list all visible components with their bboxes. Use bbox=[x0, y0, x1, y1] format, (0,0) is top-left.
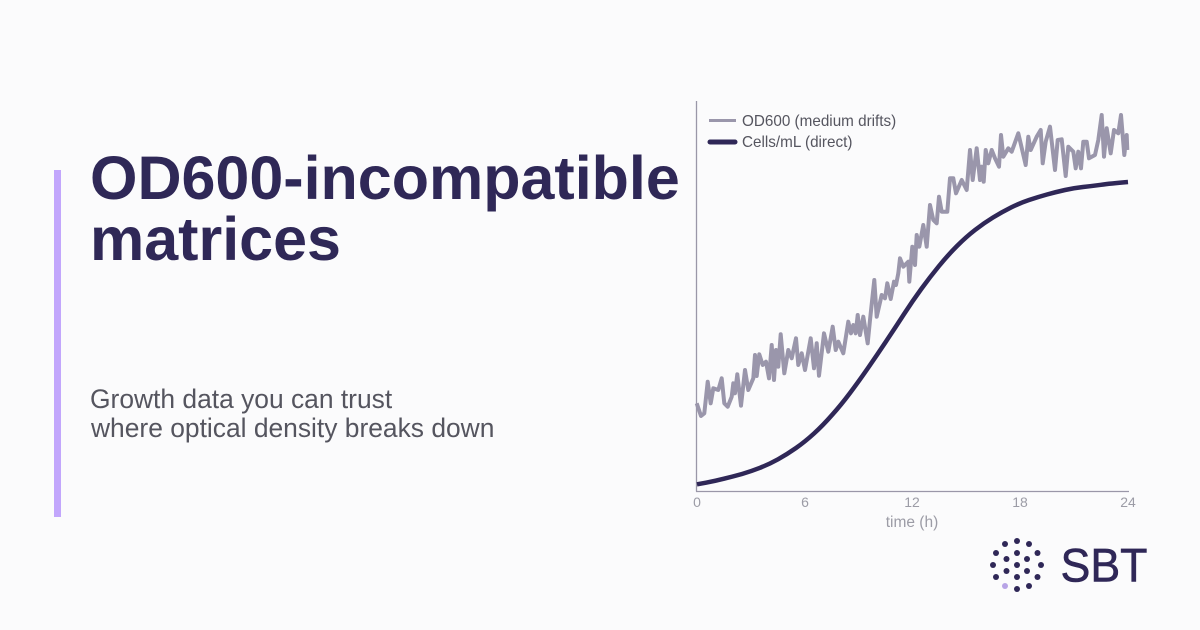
subtitle bbox=[90, 384, 494, 443]
line chart bbox=[693, 101, 1136, 531]
x axis tick labels: 6 bbox=[801, 494, 809, 510]
x axis bbox=[696, 490, 1129, 492]
x axis tick labels: 0 bbox=[693, 494, 701, 510]
logo wordmark: SBT bbox=[1060, 538, 1148, 592]
legend item: Cells/mL: Cells/mL (direct) bbox=[742, 134, 852, 151]
x axis tick labels: 18 bbox=[1012, 494, 1028, 510]
series: OD600 bbox=[697, 115, 1127, 416]
x axis tick labels: 12 bbox=[904, 494, 920, 510]
title: matrices bbox=[90, 205, 341, 273]
accent bar bbox=[54, 170, 61, 517]
title: OD600-incompatible bbox=[90, 144, 680, 212]
y axis bbox=[696, 101, 698, 492]
subtitle: Growth data you can trust bbox=[90, 384, 393, 414]
series: Cells/mL bbox=[697, 182, 1128, 484]
logo: SBT bbox=[990, 538, 1148, 592]
x axis tick labels bbox=[693, 494, 1136, 510]
x axis tick labels: 24 bbox=[1120, 494, 1136, 510]
legend item: OD600: OD600 (medium drifts) bbox=[742, 113, 896, 130]
subtitle: where optical density breaks down bbox=[90, 413, 494, 443]
title bbox=[90, 144, 680, 273]
legend bbox=[709, 113, 896, 151]
x axis title: time (h) bbox=[886, 514, 938, 531]
logo mark: dots bbox=[990, 538, 1044, 592]
